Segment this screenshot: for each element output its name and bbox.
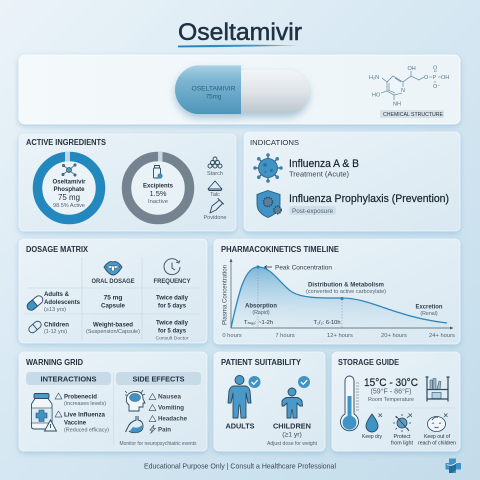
chemical structure: O⁻ [433,84,440,90]
chemical structure: O [433,66,438,72]
distribution label: Distribution & Metabolism [308,282,384,288]
icon: shield [257,190,281,218]
time axis labels [222,333,455,339]
warning: live influenza vaccine: Vaccine [64,420,86,426]
protect from light [391,414,414,446]
chemical structure: HO [372,92,381,98]
icon: capsule: 75mg [206,94,222,100]
icon: stomach [126,416,143,433]
chart: excipients donut: 1.5% [150,189,167,198]
panel: indications [244,132,460,231]
icon: thermometer [340,376,359,431]
icon: pill bottle [154,166,163,179]
warning list [149,394,187,434]
icon: povidone [210,198,224,213]
icon: head [125,390,145,411]
icon: clock [164,259,180,275]
keep dry: Keep dry [362,434,382,440]
warning list: Headache [158,416,187,422]
title: Oseltamivir [178,19,302,46]
chemical structure: NH [393,102,401,108]
influenza prophylaxis: Post-exposure [292,209,334,215]
children: (≥1 yr) [282,432,302,438]
chart: excipients donut [126,152,190,220]
chemical structure [369,66,449,118]
chemical structure: CHEMICAL STRUCTURE [383,112,444,118]
warning list: Nausea [158,394,181,400]
adults: ADULTS [226,422,254,430]
warning: probenecid: Probenecid [64,394,97,400]
row: adults: 75 mg [104,294,122,302]
distribution label: (converted to active carboxylate) [306,289,386,295]
chart: active donut: Oseltamivir [52,178,86,186]
time axis labels: 12+ hours [327,333,353,339]
row: children: Twice daily [156,320,188,326]
panel: active ingredients [19,134,236,231]
time axis labels: 24+ hours [429,333,455,339]
children: Adjust dose for weight [267,441,318,447]
temperature range: (59°F - 86°F) [370,388,412,396]
children [267,376,318,447]
icon: virus [253,153,283,183]
column: interactions [26,372,111,434]
heading: INDICATIONS [250,138,299,147]
influenza a and b: Treatment (Acute) [289,172,349,178]
column: frequency [154,259,191,285]
warning: probenecid [55,393,106,407]
icon: child figure [282,388,302,418]
column: frequency: FREQUENCY [154,278,191,285]
keep out of reach of children: reach of children [418,440,456,446]
icon: baby face [428,416,446,432]
chemical structure: OH [441,75,449,81]
warning list: Pain [158,426,171,434]
panel: pharmacokinetics timeline [214,239,460,344]
row: children: (Suspension/Capsule) [86,329,140,335]
excipient list: Starch [207,171,223,177]
chemical structure: H₂N [369,75,379,81]
warning: probenecid: (increases levels) [64,401,106,407]
icon: small capsule [27,320,43,334]
influenza prophylaxis: Influenza Prophylaxis (Prevention) [289,193,449,205]
row: adults: for 5 days [158,302,186,310]
chart: active donut: Phosphate [54,186,85,193]
panel: dosage matrix [19,239,207,343]
absorption label [244,302,277,326]
absorption label: Absorption [245,302,277,310]
icon: check badge [298,376,310,388]
row: adults [26,291,188,313]
warning: live influenza vaccine: Live Influenza [64,412,105,418]
chart: concentration curve [222,258,455,339]
column: oral dosage [92,262,135,285]
excretion label: (Renal) [420,311,438,317]
row: adults: Adults & [44,291,69,298]
keep out of reach of children: Keep out of [424,434,451,440]
children: CHILDREN [273,422,311,430]
row: children: Consult Doctor [156,336,189,340]
column: interactions: INTERACTIONS [40,374,96,384]
excretion label [416,304,443,317]
icon: shelf [426,376,450,402]
keep out of reach of children [418,414,456,446]
icon: mouth [104,262,122,275]
heading: WARNING GRID [26,358,83,367]
footer note: Educational Purpose Only | Consult a Healthcare Professional [144,464,336,470]
chemical structure: O [424,75,429,81]
heading: ACTIVE INGREDIENTS [26,138,107,147]
row: adults: Twice daily [156,294,188,302]
icon: crossed sun [397,418,407,428]
panel: capsule hero [19,55,460,124]
excipient list: Talc [210,192,220,198]
half-life label: T₁/₂: 6-10h [314,320,341,326]
column: oral dosage: ORAL DOSAGE [92,278,135,285]
row: children [27,320,189,340]
protect from light: Protect [394,434,411,440]
temperature range: 15°C - 30°C [364,377,418,389]
icon: starch [208,157,222,168]
chart: excipients donut: Inactive [148,199,168,205]
icon: water drop [366,414,378,432]
column: side effects [116,372,201,447]
chart: active donut: 98.5% Active [53,203,85,209]
icon: capsule [175,66,309,114]
heading: PATIENT SUITABILITY [221,358,302,367]
heading: PHARMACOKINETICS TIMELINE [221,245,340,254]
icon: molecule [62,164,76,176]
icon: medicine bottle [32,394,56,431]
chart: active donut: 75 mg [58,193,80,202]
chart: excipients donut: Excipients [143,182,173,190]
icon: talc [208,181,222,190]
y axis label: Plasma Concentration [222,265,228,325]
icon: capsule [26,294,44,312]
absorption label: Tₘₐₓ: ~1-2h [244,320,273,326]
warning list: Vomiting [158,404,184,412]
excretion label: Excretion [416,304,443,310]
icon: medical cross logo [446,458,461,473]
row: children: for 5 days [158,328,186,334]
influenza a and b [289,158,359,178]
excipient list: Povidone [204,215,226,221]
chemical structure: OH [408,66,416,72]
time axis labels: 0 hours [222,333,242,339]
chemical structure: N [401,88,405,94]
excipient list [204,157,226,221]
row: adults: Adolescents [44,299,80,306]
time axis labels: 20+ hours [381,333,407,339]
influenza a and b: Influenza A & B [289,158,359,170]
row: children: Weight-based [93,322,133,328]
panel: patient suitability [214,352,325,451]
peak label: Peak Concentration [275,264,332,272]
monitoring note: Monitor for neuropsychiatric events [120,441,197,447]
protect from light: from light [391,440,414,446]
influenza prophylaxis [289,193,449,215]
heading: DOSAGE MATRIX [26,245,89,254]
chemical structure: P [432,75,436,81]
row: adults: Capsule [101,302,125,310]
warning: live influenza vaccine [55,411,109,434]
row: adults: (≥13 yrs) [44,307,66,313]
panel: warning grid [19,352,207,451]
time axis labels: 7 hours [275,333,295,339]
warning: live influenza vaccine: (Reduced efficacy) [64,428,109,434]
temperature range: Room Temperature [368,397,414,403]
row: children: Children [44,322,69,328]
panel: storage guide [332,352,460,451]
heading: STORAGE GUIDE [338,358,400,367]
column: side effects: SIDE EFFECTS [132,374,184,384]
icon: capsule: OSELTAMIVIR [192,86,236,92]
absorption label: (Rapid) [252,310,270,316]
distribution label [306,282,386,295]
icon: adult figure [228,376,251,418]
temperature range [364,377,418,403]
chart: active donut [38,152,100,220]
icon: check badge [248,376,260,388]
row: children: (1-12 yrs) [44,329,67,335]
